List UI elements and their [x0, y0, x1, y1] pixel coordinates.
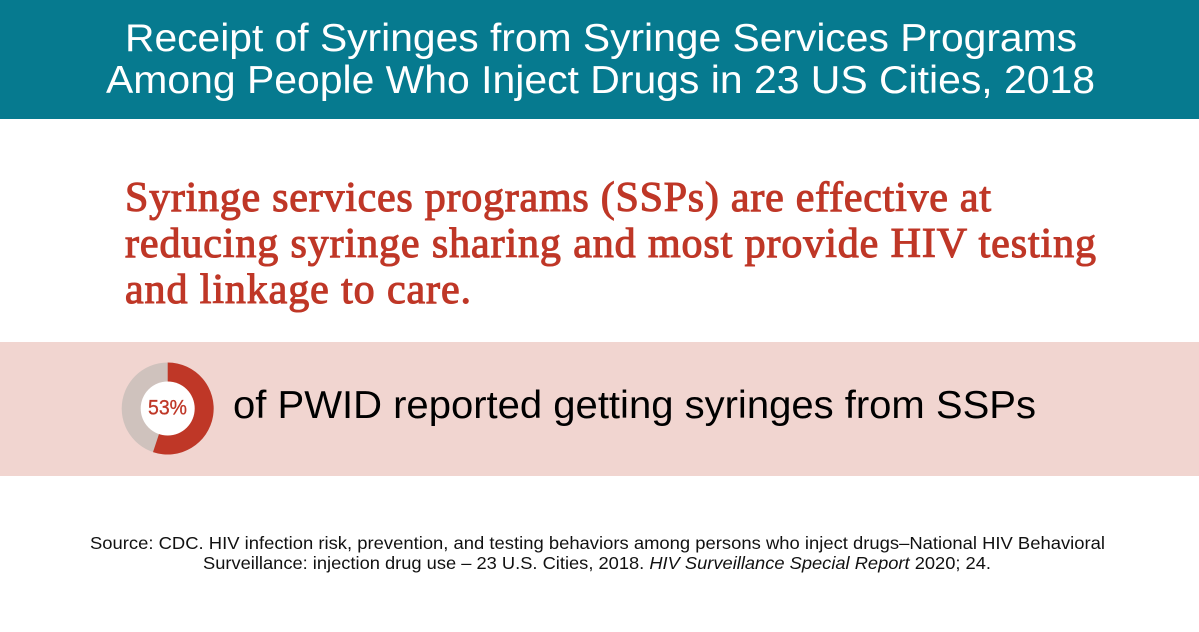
donut chart: 53% [122, 362, 214, 454]
title banner: Among People Who Inject Drugs in 23 US Cities, 2018 [106, 59, 1095, 102]
key message heading: Syringe services programs (SSPs) are effective at [125, 175, 991, 221]
key message heading: and linkage to care. [125, 267, 471, 313]
donut chart: 53%: 53% [148, 396, 187, 420]
key message heading [125, 175, 1096, 313]
source citation: Surveillance: injection drug use – 23 U.S. Cities, 2018. HIV Surveillance Special Report 2020; 24. [203, 553, 991, 573]
statistic text: of PWID reported getting syringes from SSPs [233, 384, 1036, 427]
title banner: Receipt of Syringes from Syringe Services Programs [125, 17, 1077, 60]
source citation [90, 533, 1105, 573]
statistic panel [0, 342, 1199, 476]
key message heading: reducing syringe sharing and most provide HIV testing [125, 221, 1096, 267]
title banner [0, 0, 1199, 119]
source citation: Source: CDC. HIV infection risk, prevention, and testing behaviors among persons who inject drugs–National HIV Behavioral [90, 533, 1105, 553]
